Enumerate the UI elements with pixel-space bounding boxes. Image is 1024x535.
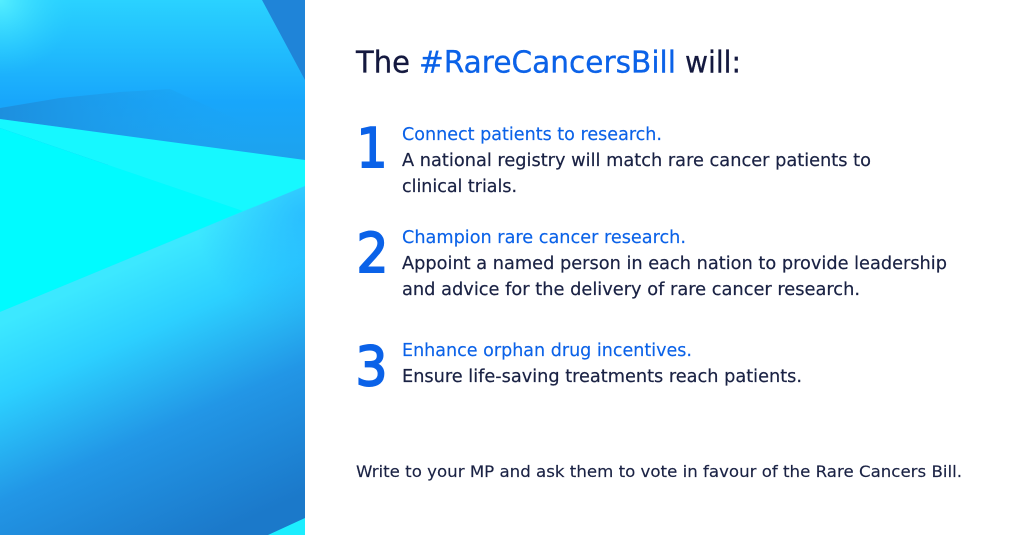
item 3 [356,335,802,398]
number 1: 1 [356,117,388,180]
title: will: [685,46,741,80]
heading 2: Champion rare cancer research. [402,228,686,248]
body 1 [402,151,871,197]
item 2 [356,222,947,300]
heading 1: Connect patients to research. [402,125,662,145]
number 3: 3 [356,335,388,398]
item 1 [356,117,871,197]
body 2 [402,254,947,300]
heading 3: Enhance orphan drug incentives. [402,341,692,361]
title: #RareCancersBill [419,46,676,80]
number 2: 2 [356,222,388,285]
body 2: and advice for the delivery of rare cancer research. [402,280,860,300]
title [355,46,741,80]
body 3: Ensure life-saving treatments reach patients. [402,367,802,387]
title: The [355,46,410,80]
body 1: clinical trials. [402,177,517,197]
body 1: A national registry will match rare cancer patients to [402,151,871,171]
panel: decorative gradient [0,0,305,535]
body 2: Appoint a named person in each nation to provide leadership [402,254,947,274]
call to action: Write to your MP and ask them to vote in favour of the Rare Cancers Bill. [356,462,962,481]
